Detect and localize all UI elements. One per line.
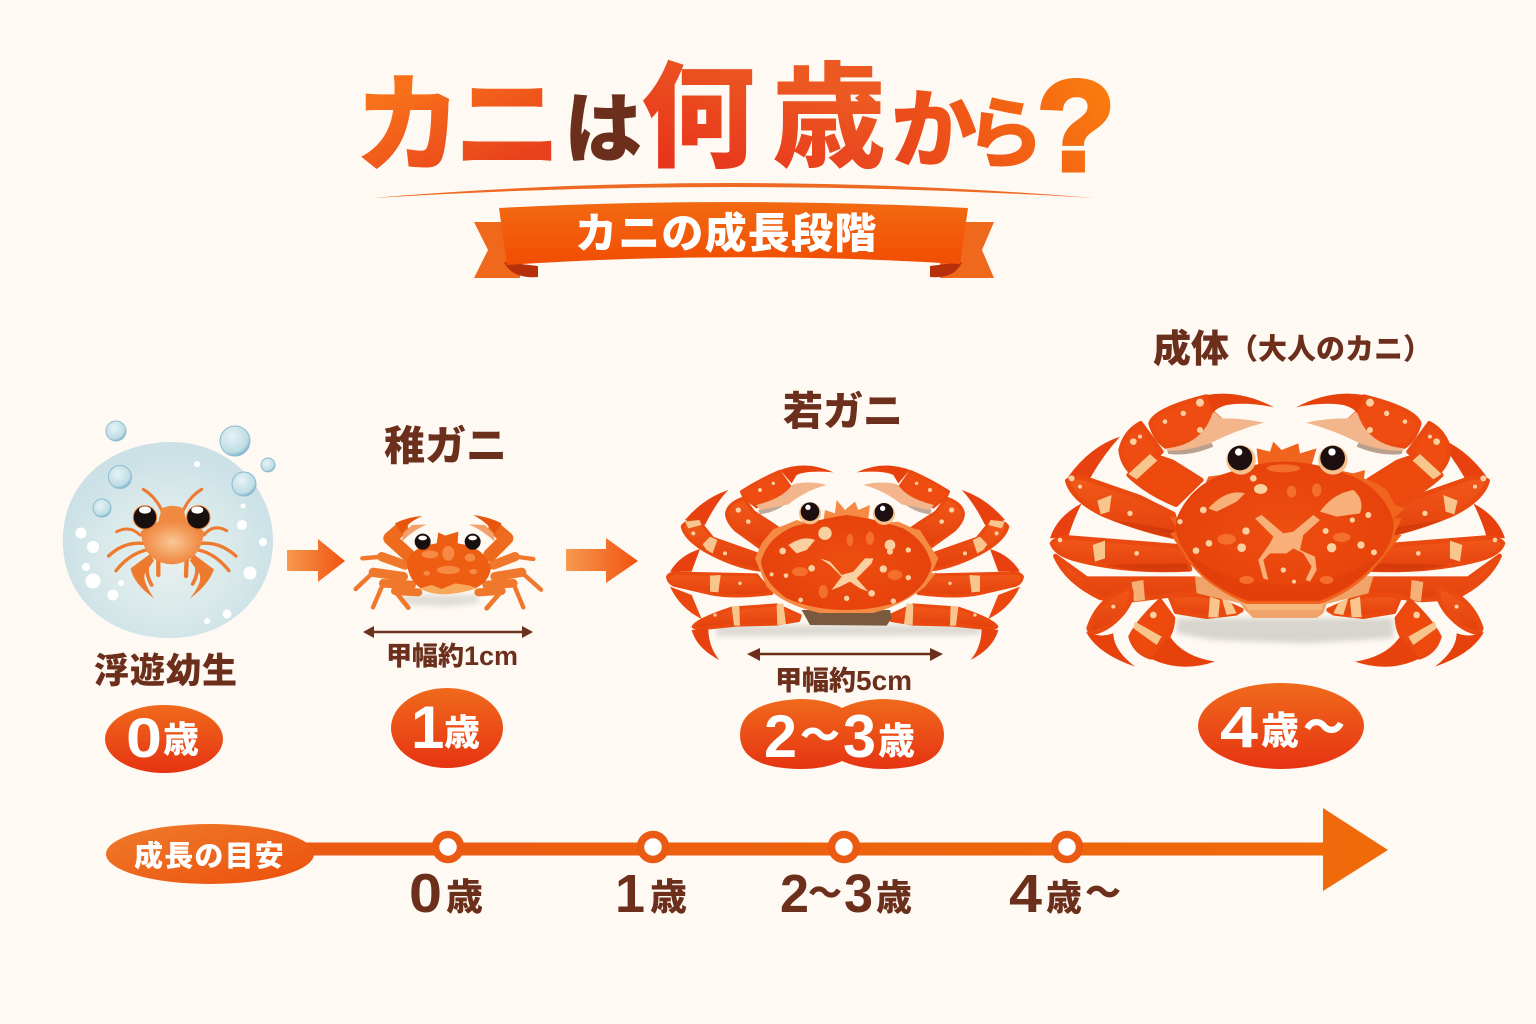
timeline markers [436,834,1080,860]
width text: 1cm: 甲幅約 [386,636,464,673]
width arrow: 5cm [747,648,943,661]
age pill: 2-3: 歳 [878,711,915,765]
ribbon text: カニの成長段階 [575,200,877,261]
arrow: 1 to 2-3 [566,538,638,583]
timeline label: 4+: 4 [1009,864,1042,924]
timeline label: 2-3 [780,864,912,924]
label: planktonic larva: 浮遊幼生 [94,643,238,694]
timeline label: 0 [409,862,483,924]
title: 歳 [772,26,886,191]
age pill: 2-3: 〜 [800,703,840,761]
timeline label: 0: 0 [409,862,442,924]
timeline label: 2-3: 3 [844,864,873,924]
label: juvenile crab: 稚ガニ [384,412,507,472]
age pill: 1: 1 [411,694,444,761]
title: ニ [454,39,562,195]
label: adult crab [1153,318,1432,373]
width arrow: 1cm [363,626,533,638]
width text: 1cm: 1cm [464,641,518,671]
title: か [891,60,977,185]
title: 何 [641,26,755,191]
timeline label: 2-3: 〜 [808,866,842,915]
width text: 5cm: 甲幅約 [775,659,856,698]
label: adult crab: 成体 [1153,318,1229,373]
timeline label pill: 成長の目安 [134,833,285,875]
timeline label: 4+ [1009,864,1121,924]
width text: 1cm [386,636,518,673]
age pill: 1 [391,688,503,768]
timeline label: 1 [615,864,687,924]
age pill: 4+ [1198,683,1364,769]
title: ら [966,72,1044,184]
title: は [564,67,642,179]
timeline label: 0: 歳 [446,867,483,921]
age pill: 4+: 〜 [1303,694,1345,755]
age pill: 2-3: 3 [843,703,876,770]
timeline axis arrow [300,808,1388,891]
larva crab [109,489,236,598]
age pill: 1: 歳 [444,704,480,756]
air bubbles [93,421,275,517]
timeline label: 2-3: 歳 [876,869,912,921]
ribbon banner [474,200,994,278]
width text: 5cm [775,659,912,698]
adult crab illustration [1050,394,1505,667]
stage 0: plankton larva illustration [63,421,275,638]
timeline [106,808,1388,924]
age pill: 0: 0 [126,706,162,769]
timeline label: 2-3: 2 [780,864,809,924]
timeline label pill [106,824,314,884]
age pill: 4+: 歳 [1261,700,1299,755]
title [354,26,1115,198]
age pill: 2-3: 2 [764,703,797,770]
label: young crab: 若ガニ [783,379,903,437]
timeline label: 4+: 歳 [1046,869,1082,921]
width text: 5cm: 5cm [856,665,912,696]
label: adult crab: （大人のカニ） [1229,326,1432,368]
arrow: 0 to 1 [287,539,345,582]
young crab illustration [668,466,1022,660]
age pill: 4+: 4 [1220,695,1258,760]
age pill: 2-3 [740,699,944,770]
title: ? [1037,55,1115,198]
timeline label: 1: 1 [615,864,645,924]
age pill: 0 [105,705,223,773]
age pill: 0: 歳 [163,711,199,763]
timeline label: 1: 歳 [650,867,687,921]
title: カ [354,39,462,195]
title underline swoosh [372,183,1094,198]
juvenile crab illustration [356,515,541,608]
timeline label: 4+: 〜 [1085,864,1121,916]
